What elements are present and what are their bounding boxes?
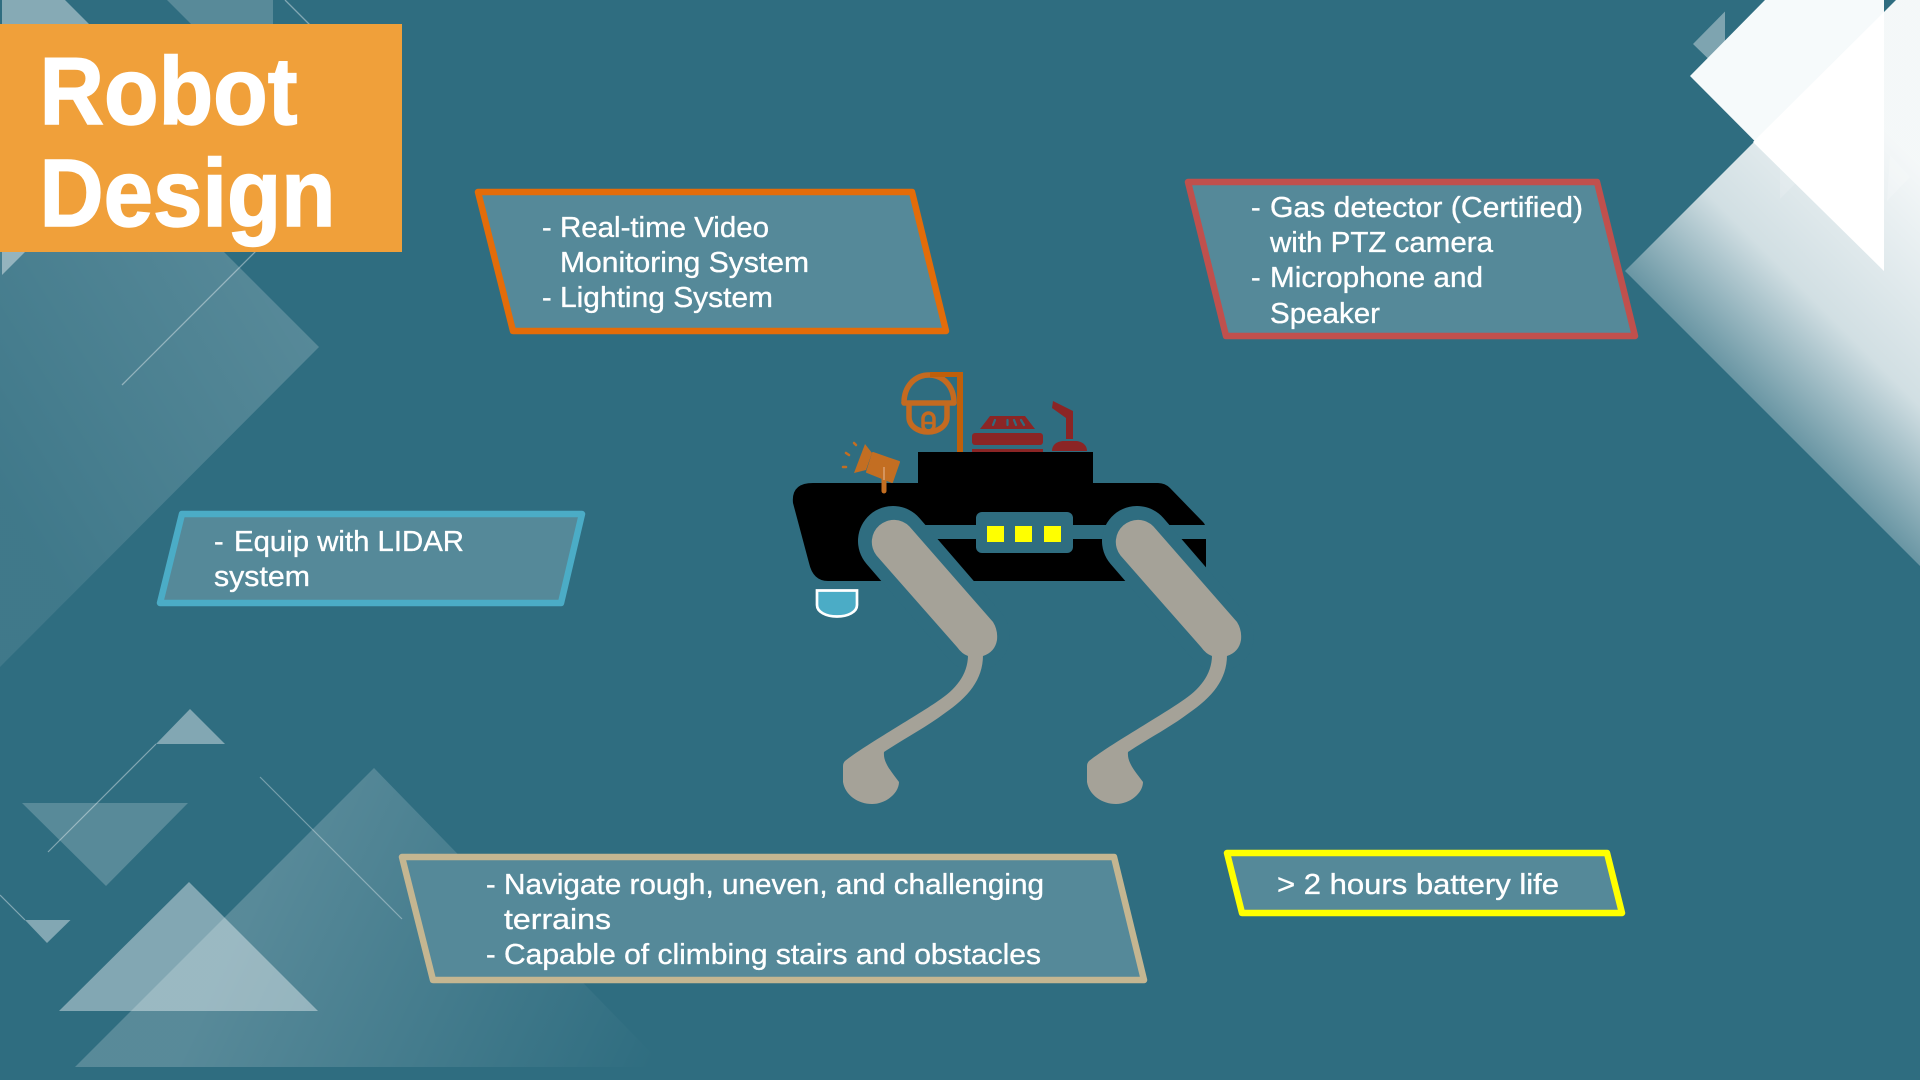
panel: camera and lighting: -	[542, 212, 552, 244]
panel: terrain navigation: Capable of climbing stairs and obstacles	[504, 939, 1041, 971]
panel: gas detector and audio: -	[1251, 262, 1261, 294]
panel: gas detector and audio: Speaker	[1270, 298, 1380, 330]
icon: PTZ camera	[904, 372, 963, 452]
panel: terrain navigation: -	[486, 869, 496, 901]
decorative shapes: top left	[0, 0, 330, 667]
panel: terrain navigation	[402, 857, 1144, 980]
body band	[915, 525, 1207, 539]
icon: gas detector	[972, 416, 1043, 452]
front leg lower	[1087, 655, 1227, 804]
panel: camera and lighting: Real-time Video	[560, 212, 769, 244]
status panel with lights	[976, 512, 1073, 553]
panel: camera and lighting: Monitoring System	[560, 247, 809, 279]
panel: gas detector and audio: -	[1251, 192, 1261, 224]
panel: LIDAR: Equip with LIDAR	[234, 526, 464, 558]
decorative shapes: top right	[1625, 0, 1920, 566]
icon: LIDAR sensor	[817, 590, 857, 616]
panel: camera and lighting: -	[542, 282, 552, 314]
title	[0, 24, 402, 252]
panel: camera and lighting: Lighting System	[560, 282, 773, 314]
panel: terrain navigation: -	[486, 939, 496, 971]
panel: LIDAR: system	[214, 561, 310, 593]
panel: gas detector and audio: Microphone and	[1270, 262, 1483, 294]
title: Robot	[40, 38, 298, 145]
robot illustration	[793, 372, 1241, 804]
panel: gas detector and audio: Gas detector (Certified)	[1270, 192, 1583, 224]
rear leg upper	[872, 520, 997, 656]
panel: LIDAR	[160, 514, 582, 603]
icon: spotlight	[843, 443, 899, 491]
icon: microphone	[1052, 401, 1087, 451]
title: Design	[40, 140, 336, 247]
panel: gas detector and audio: with PTZ camera	[1269, 227, 1494, 259]
front leg upper	[1116, 520, 1241, 656]
robot body	[793, 452, 1206, 581]
panel: LIDAR: -	[214, 526, 224, 558]
panel: gas detector and audio	[1188, 182, 1635, 336]
panel: terrain navigation: terrains	[504, 904, 611, 936]
decorative shapes: bottom left triangles	[0, 709, 665, 1067]
rear leg lower	[843, 655, 983, 804]
panel: battery life	[1227, 853, 1622, 913]
panel: camera and lighting	[478, 192, 946, 331]
panel: terrain navigation: Navigate rough, uneven, and challenging	[504, 869, 1044, 901]
panel: battery life: > 2 hours battery life	[1277, 869, 1559, 901]
